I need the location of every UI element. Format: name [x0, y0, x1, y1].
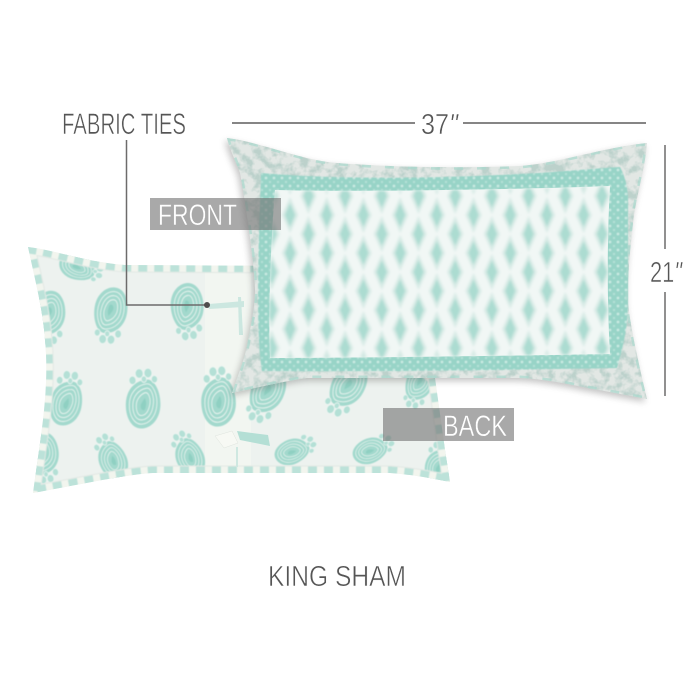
panel: front of pillow sham: [225, 138, 647, 402]
caption: king sham: KING SHAM: [268, 561, 406, 593]
paisley motifs: [26, 251, 451, 486]
leader line: fabric ties: [126, 140, 210, 308]
width dimension: 37 inches: 37": [421, 109, 459, 141]
label: front: FRONT: [158, 199, 237, 232]
diamond print centre: [269, 186, 610, 358]
fabric tie: lower: [215, 431, 270, 467]
height dimension: 21 inches: 21": [650, 257, 683, 289]
flange edge: [227, 138, 647, 399]
label: back: [383, 408, 514, 443]
label: fabric ties: FABRIC TIES: [62, 108, 186, 141]
checked edge band: [28, 247, 450, 493]
label: back: BACK: [443, 410, 507, 443]
teal border band: [258, 167, 628, 371]
fabric tie: upper: [209, 297, 244, 335]
panel: back of pillow sham: [26, 247, 451, 493]
